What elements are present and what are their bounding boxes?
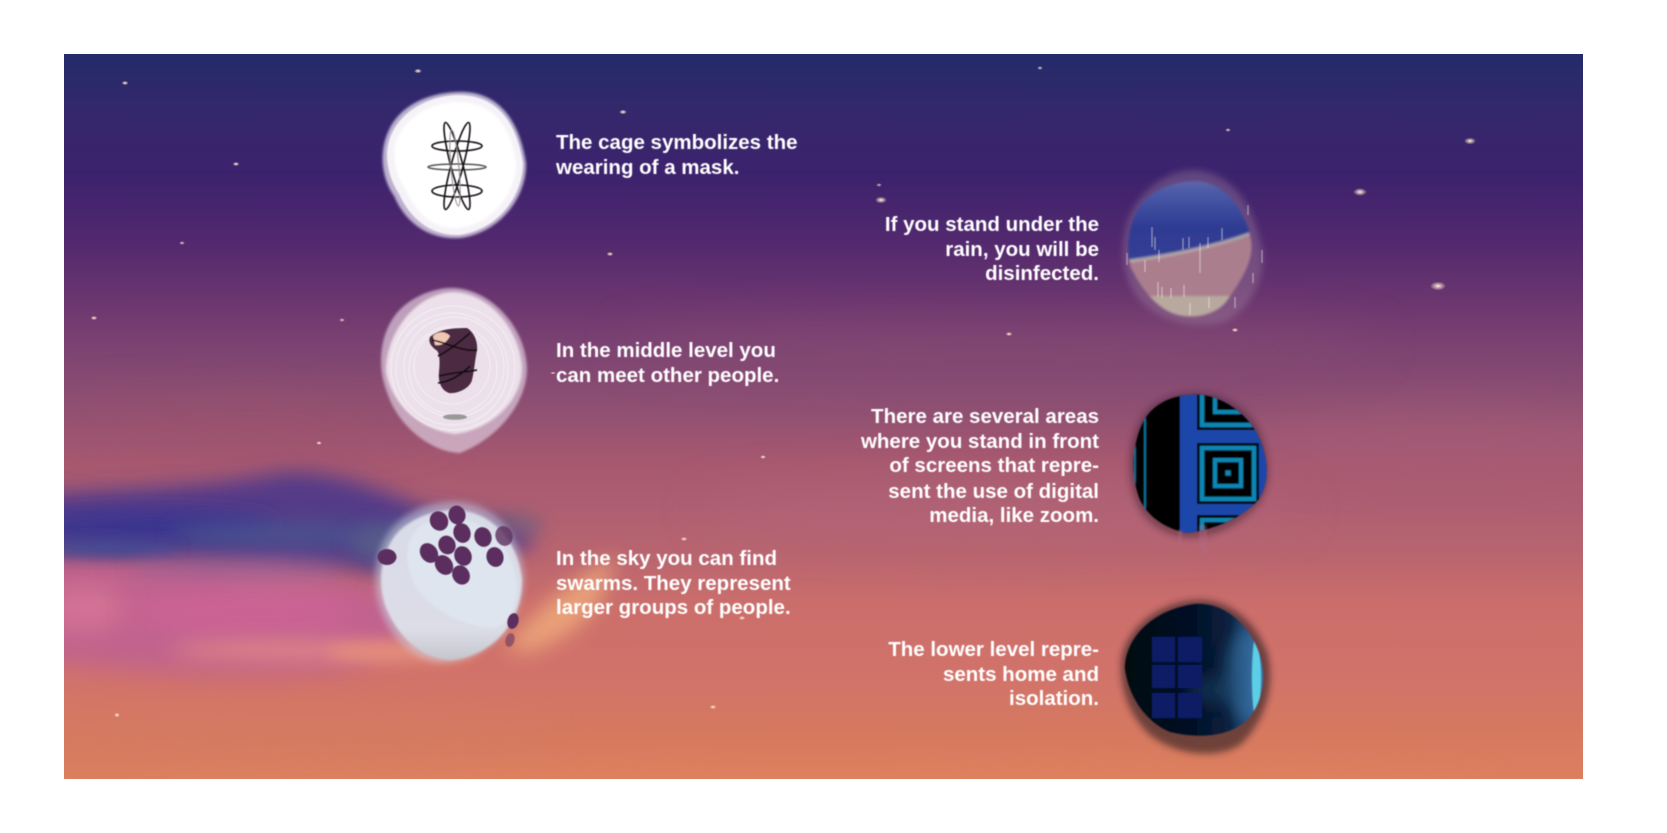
scribble strokes bbox=[391, 306, 515, 430]
text: screens: media, like zoom. bbox=[929, 504, 1099, 527]
text: cage: The cage symbolizes the bbox=[556, 131, 798, 154]
floating disc bbox=[443, 414, 467, 420]
icon: cage orb bbox=[383, 92, 526, 238]
text: screens: where you stand in front bbox=[860, 430, 1099, 453]
text: middle level: can meet other people. bbox=[556, 364, 779, 387]
cloud: blue band bbox=[25, 472, 543, 576]
text: swarms: In the sky you can find bbox=[556, 547, 777, 570]
text: home: sents home and bbox=[943, 663, 1099, 686]
icon: home orb bbox=[1120, 600, 1270, 754]
window panes bbox=[1152, 637, 1202, 718]
icon: rain orb bbox=[1120, 170, 1270, 330]
cage lines bbox=[428, 121, 486, 211]
light crescent bbox=[1252, 636, 1261, 718]
text: rain: disinfected. bbox=[985, 262, 1099, 285]
icon: swarm orb bbox=[375, 502, 524, 662]
faded screen ghost bbox=[1180, 525, 1205, 555]
text: swarms bbox=[556, 547, 791, 619]
text: screens: sent the use of digital bbox=[888, 480, 1099, 503]
soft cloud bands bbox=[439, 126, 1249, 736]
text: home: The lower level repre- bbox=[888, 638, 1099, 661]
figure in cage bbox=[429, 328, 477, 393]
rain scene bbox=[1126, 180, 1253, 318]
text: rain bbox=[885, 213, 1099, 285]
text: rain: rain, you will be bbox=[945, 238, 1099, 261]
sky gradient bbox=[64, 54, 1583, 779]
text: swarms: larger groups of people. bbox=[556, 596, 791, 619]
icon: middle level orb bbox=[381, 288, 527, 453]
text: swarms: swarms. They represent bbox=[556, 572, 791, 595]
text: screens: of screens that repre- bbox=[889, 454, 1099, 477]
swarm seeds bbox=[378, 504, 520, 648]
text: cage bbox=[555, 131, 798, 179]
rain lines bbox=[1127, 205, 1262, 315]
screen wall bbox=[1132, 394, 1268, 534]
stars bbox=[90, 66, 1476, 718]
screen squares bbox=[1196, 394, 1260, 532]
text: screens: There are several areas bbox=[871, 405, 1099, 428]
text: middle level bbox=[556, 339, 779, 387]
text: cage: wearing of a mask. bbox=[555, 156, 739, 179]
cloud: orange glow beside swarm orb bbox=[505, 555, 615, 652]
text: middle level: In the middle level you bbox=[556, 339, 776, 362]
text: screens bbox=[860, 405, 1099, 527]
text: home: isolation. bbox=[1009, 687, 1099, 710]
text: home bbox=[888, 638, 1099, 710]
infographic scene bbox=[64, 54, 1583, 779]
cloud: pink and salmon glow bbox=[30, 557, 475, 673]
text: rain: If you stand under the bbox=[885, 213, 1099, 236]
icon: screens orb bbox=[1126, 390, 1272, 554]
home interior bbox=[1124, 603, 1264, 737]
